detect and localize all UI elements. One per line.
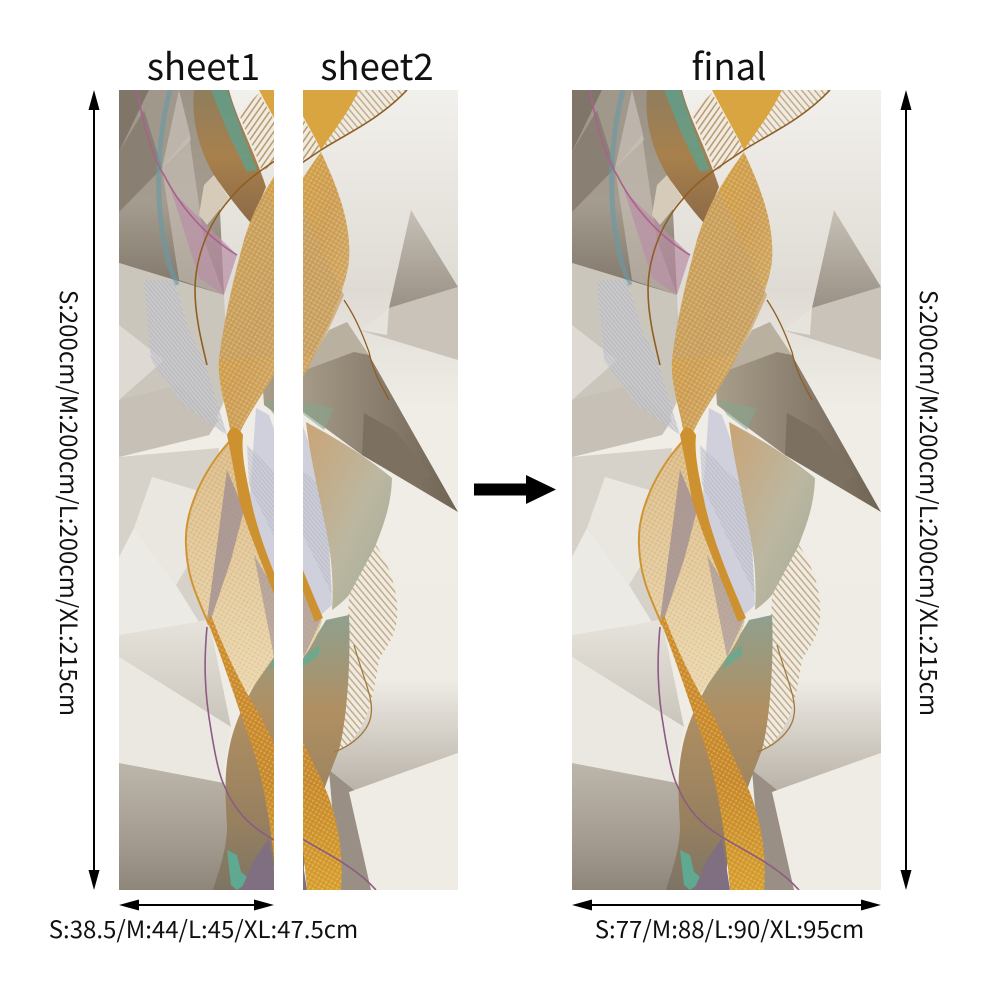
teal swoosh line bbox=[612, 90, 630, 285]
grey fan over lavender strip bbox=[700, 445, 755, 595]
arrow: right height bbox=[900, 90, 912, 890]
long purple line bbox=[658, 627, 799, 890]
geometric shapes: upper left dark block bbox=[572, 90, 677, 295]
arrow: sheets to final bbox=[474, 475, 556, 504]
right leaf bbox=[729, 422, 815, 610]
central rust ribbon bbox=[666, 615, 773, 890]
background wash bbox=[572, 90, 881, 890]
teal patches bbox=[680, 645, 742, 890]
text: right height sizes: S:200cm/M:200cm/L:200cm/XL:215cm bbox=[913, 290, 948, 716]
brown right line bbox=[767, 300, 812, 400]
text: sheet width sizes: S:38.5/M:44/L:45/XL:47.5cm bbox=[49, 910, 358, 945]
lavender strip bbox=[702, 408, 755, 615]
right striped fan bbox=[757, 545, 820, 752]
geometric shape: pale polygon bbox=[587, 477, 649, 585]
small cream fan bbox=[652, 175, 682, 225]
teal patch on ribbon bbox=[664, 90, 710, 172]
teal rust ribbon bbox=[646, 90, 719, 223]
muted band below gold bulge bbox=[715, 322, 794, 382]
arrow: left height bbox=[88, 90, 100, 890]
geometric shapes: left mid grey planes bbox=[572, 263, 682, 635]
top left striped fan bbox=[692, 93, 744, 172]
left cream leaf bbox=[639, 440, 745, 697]
geometric shape: lower left band bbox=[572, 620, 684, 727]
pink swoosh bbox=[624, 190, 690, 295]
geometric shape: lower left pale plane bbox=[572, 657, 684, 783]
arrow: final width bbox=[572, 900, 881, 910]
text: final width sizes: S:77/M:88/L:90/XL:95cm bbox=[595, 910, 864, 945]
gold wide band bbox=[660, 615, 765, 890]
orange outline of left leaf bbox=[639, 442, 682, 625]
blue grey fan bbox=[597, 280, 680, 435]
geometric shape: pale lower triangle bbox=[572, 528, 662, 650]
brown line bbox=[648, 90, 830, 365]
darker gold overlap bbox=[672, 190, 767, 360]
title: sheet2: sheet2 bbox=[320, 38, 434, 91]
geometric shapes: lower right grey planes bbox=[752, 680, 881, 890]
panel: sheet1 artwork bbox=[119, 90, 274, 890]
pink line bbox=[590, 90, 690, 255]
purple streaks bbox=[660, 470, 744, 657]
gold neck band bbox=[680, 428, 746, 622]
geometric shape: lower left dark block bbox=[572, 763, 697, 890]
title: final: final bbox=[691, 38, 767, 91]
panel: sheet2 artwork bbox=[303, 90, 458, 890]
dark triangle bbox=[715, 352, 881, 512]
gold top strand bbox=[712, 90, 782, 150]
arrow: sheet1 width bbox=[119, 900, 274, 910]
left leaf texture bbox=[639, 440, 745, 697]
gold bulge texture bbox=[672, 152, 772, 437]
title: sheet1: sheet1 bbox=[147, 38, 260, 91]
geometric shapes: right triangle bbox=[782, 210, 881, 360]
top right striped fan bbox=[744, 90, 830, 148]
gold bulge ribbon bbox=[672, 152, 772, 437]
purple bottom area bbox=[694, 838, 730, 890]
panel: final wallpaper artwork bbox=[572, 90, 881, 890]
text: left height sizes: S:200cm/M:200cm/L:200cm/XL:215cm bbox=[53, 290, 88, 716]
gold edge of striped fan bbox=[757, 645, 795, 752]
geometric shape: lower right pale plane bbox=[772, 753, 881, 890]
gold band texture bbox=[660, 615, 765, 890]
